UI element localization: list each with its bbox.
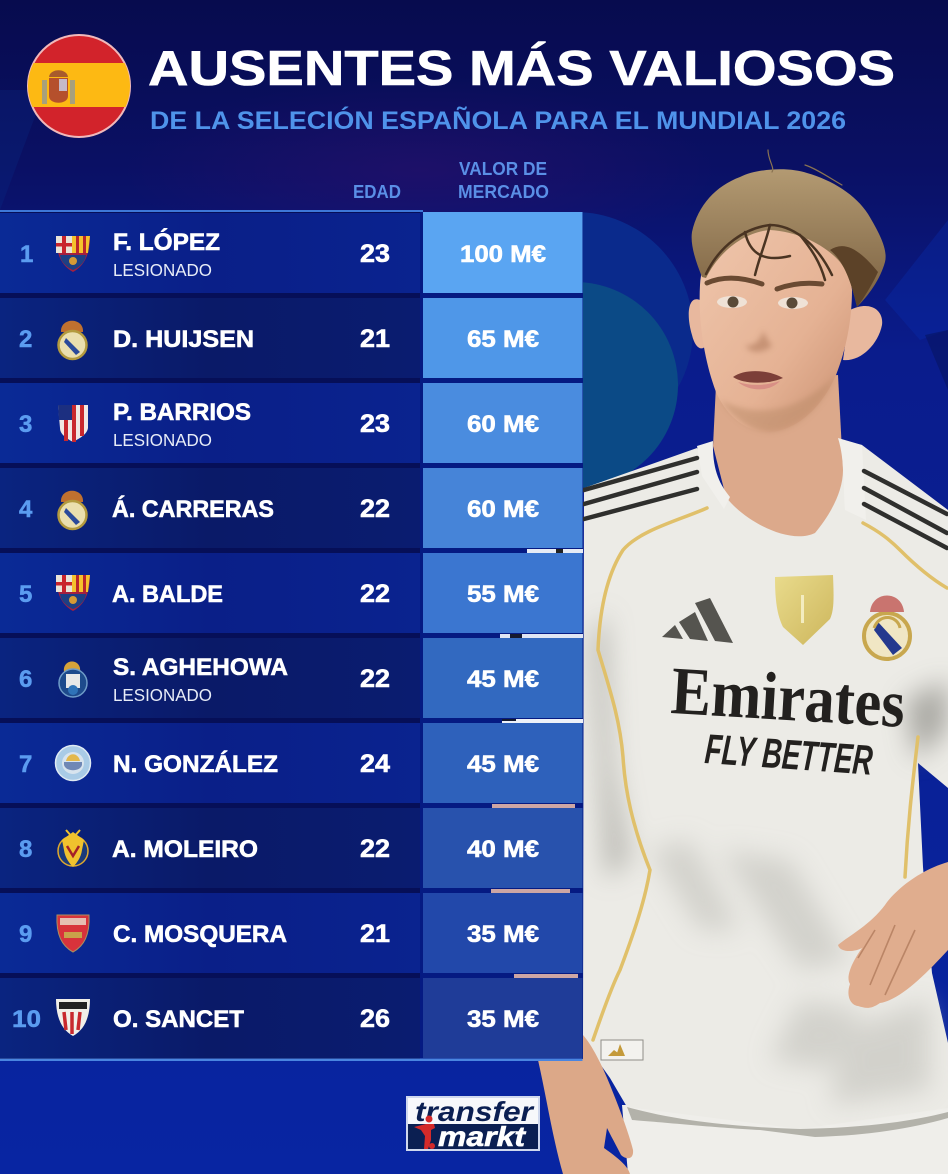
row 3: LESIONADO [113,430,212,450]
gap reveal 8-9 [491,889,570,893]
row 8: 40 M€ [467,836,539,863]
row 4: 60 M€ [467,496,539,523]
head: face [700,225,852,432]
row 10: 10 [12,1006,41,1033]
row 9: C. MOSQUERA [113,921,287,948]
row 7: N. GONZÁLEZ [113,750,278,778]
row 2: D. HUIJSEN [113,326,254,353]
shirt body [583,440,948,1129]
transfermarkt logo [407,1096,539,1152]
left arm and hand [490,800,633,1174]
table top rule [0,210,423,212]
right arm and hand [838,862,948,1008]
crest: FC Porto [59,662,87,697]
row 2: 65 M€ [467,326,539,353]
row 2 [0,298,582,378]
subtitle: DE LA SELECIÓN ESPAÑOLA PARA EL MUNDIAL 2026 [150,105,846,135]
gold trim [593,508,947,1040]
row 10: 35 M€ [467,1006,539,1033]
row 7: 24 [360,750,390,778]
row 5: 22 [360,580,390,608]
row 3: 60 M€ [467,411,539,438]
column header: age: EDAD [353,182,401,202]
row 9: 21 [360,920,390,948]
shirt waistband shadow [627,1107,948,1137]
shirt folds [590,610,948,1105]
row 3: 23 [360,410,390,438]
gap reveal 6-7 [502,719,583,723]
row 5: 5 [19,581,32,608]
player photo illustration [490,150,948,1174]
row 2: 2 [19,326,32,353]
row 10: O. SANCET [113,1006,244,1033]
head: eyebrows [707,278,822,289]
shorts [622,1105,948,1174]
row 5: A. BALDE [112,581,223,608]
row 8: 8 [19,836,32,863]
gap reveal 5-6 [500,634,583,638]
row 9 [0,893,582,973]
row 3: 3 [19,411,32,438]
flag coat of arms [42,70,75,104]
row 6: 22 [360,665,390,693]
row 4: 22 [360,495,390,523]
row 9: 9 [19,921,32,948]
row 1 [0,212,582,293]
head: hair [692,169,886,307]
logo footballer figure [414,1116,435,1149]
row 1: 100 M€ [460,241,546,268]
column header: market value: VALOR DE [459,159,547,179]
head: dark side hair [830,246,878,307]
row 5: 55 M€ [467,581,539,608]
head: nose shadow [745,330,772,352]
row 7: 45 M€ [467,751,539,778]
row 9: 35 M€ [467,921,539,948]
row 7 [0,723,582,803]
gold champions patch [775,575,834,645]
crest: Athletic Club [56,999,90,1036]
crest: FC Barcelona [56,575,90,611]
row 2: 21 [360,325,390,353]
neck [713,375,843,536]
sponsor text: Emirates [669,652,907,742]
gap reveal 9-10 [514,974,578,978]
row 7: 7 [19,751,32,778]
row 6: LESIONADO [113,685,212,705]
crest: Atletico Madrid [58,405,88,442]
gap reveal 7-8 [492,804,575,808]
crest: Real Madrid [58,321,86,359]
real madrid shirt crest [864,596,910,659]
row 3: P. BARRIOS [113,399,251,426]
adidas logo [662,598,733,643]
row 5 [0,553,582,633]
row 1: 23 [360,240,390,268]
crest: Real Madrid [58,491,86,529]
transfermarkt logo: markt [438,1121,527,1152]
collar [697,438,866,520]
row 6: 45 M€ [467,666,539,693]
transfermarkt logo: transfer [415,1096,535,1127]
row 8: A. MOLEIRO [112,836,258,863]
crest: FC Barcelona [56,236,90,272]
crest: Arsenal [57,915,89,952]
row 8 [0,808,582,888]
row 8: 22 [360,835,390,863]
table bottom rule [0,1058,582,1061]
row 10: 26 [360,1005,390,1033]
head: face shadow [720,375,836,432]
title: AUSENTES MÁS VALIOSOS [148,42,895,96]
shoulder stripes [584,458,947,548]
row 1: LESIONADO [113,260,212,280]
row 6: S. AGHEHOWA [113,654,288,681]
table [0,210,583,1061]
row 1: F. LÓPEZ [113,228,220,256]
finger lines [858,925,915,995]
table gaps background [0,212,423,1061]
gap reveal 4-5 [527,549,583,553]
row 4 [0,468,582,548]
flag of Spain [28,35,130,137]
head: mouth [733,371,783,389]
column header: market value [458,159,549,202]
column header: market value: MERCADO [458,182,549,202]
value column gaps [420,212,583,1059]
jersey hem tag [601,1040,643,1060]
crest: Manchester City [56,746,90,780]
head: hair strands [706,150,842,280]
head: ears [689,299,882,360]
row 6: 6 [19,666,32,693]
row 1: 1 [20,241,33,268]
row 4: 4 [19,496,33,523]
row 4: Á. CARRERAS [112,495,274,523]
row 10 [0,978,582,1058]
head: eyes [717,296,808,309]
crest: Villarreal [58,830,88,867]
row 3 [0,383,582,463]
row 6 [0,638,582,718]
